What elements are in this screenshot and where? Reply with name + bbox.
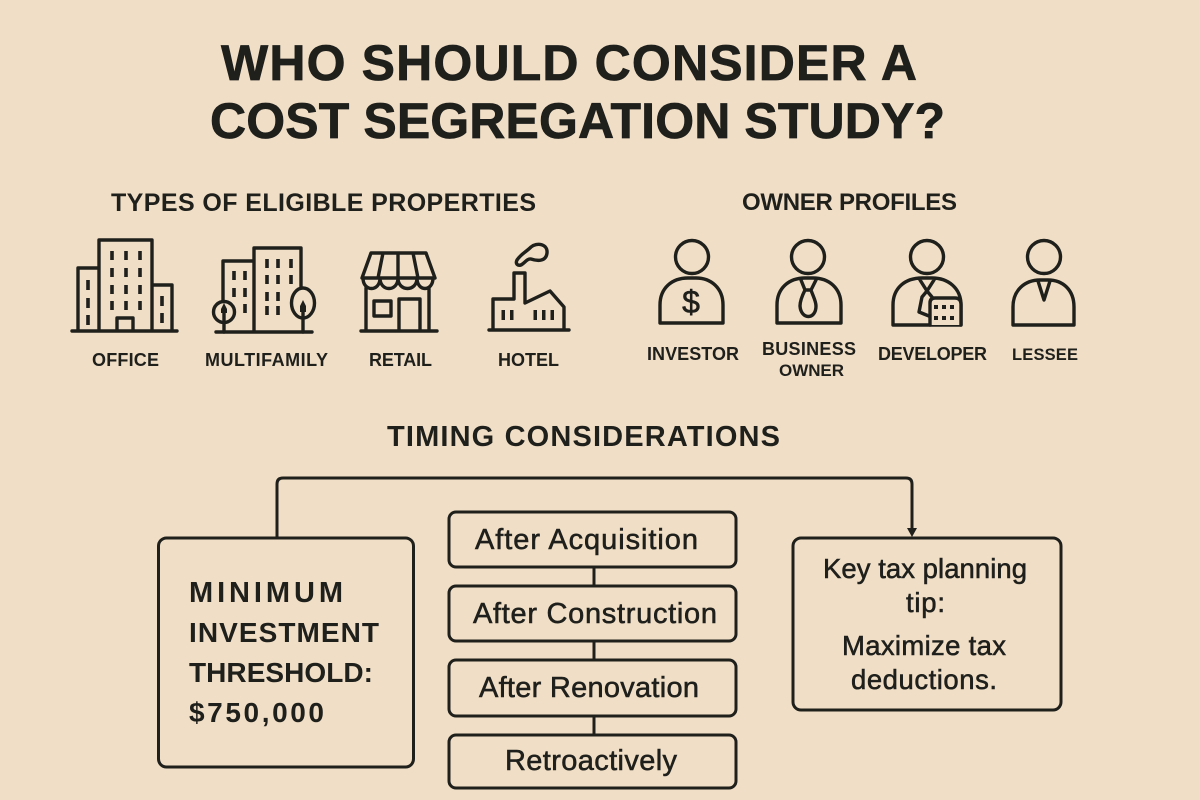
label: office: OFFICE [92,350,159,370]
step: retroactively [449,735,736,788]
panel: key tax planning tip: tip: [906,587,945,618]
step: after acquisition [449,512,736,567]
icon: multifamily [214,248,314,332]
panel: key tax planning tip: deductions. [851,664,997,695]
step: after construction: After Construction [473,598,717,630]
title: WHO SHOULD CONSIDER A [221,35,917,91]
panel: minimum investment threshold: THRESHOLD: [189,657,373,688]
icon: investor: $ [682,284,700,320]
panel: key tax planning tip: Maximize tax [842,630,1006,661]
title: COST SEGREGATION STUDY? [210,93,945,149]
label: business owner: BUSINESS [762,339,856,359]
panel: key tax planning tip [793,538,1061,710]
arrow: connector from threshold box to tax tip box [277,478,917,538]
label: retail: RETAIL [369,350,432,370]
panel: key tax planning tip: Key tax planning [823,553,1027,584]
step: retroactively: Retroactively [505,745,678,777]
label: investor: INVESTOR [647,344,739,364]
heading: types of eligible properties: TYPES OF ELIGIBLE PROPERTIES [111,189,536,217]
label: business owner: OWNER [779,361,844,380]
timeline connectors [592,567,596,735]
label: hotel: HOTEL [498,350,559,370]
label: lessee: LESSEE [1012,346,1078,364]
icon: retail [361,253,437,331]
step: after renovation: After Renovation [479,672,699,704]
label: multifamily: MULTIFAMILY [205,350,328,370]
step: after renovation [449,660,736,716]
icon: lessee [1013,240,1074,325]
label: developer: DEVELOPER [878,344,987,364]
heading: owner profiles: OWNER PROFILES [742,189,957,216]
label: business owner [762,339,856,380]
heading: timing considerations: TIMING CONSIDERATIONS [387,421,780,453]
icon: investor [660,240,723,323]
panel: minimum investment threshold [158,538,414,767]
icon: hotel [489,244,569,330]
icon: developer [893,240,961,325]
panel: minimum investment threshold: INVESTMENT [189,617,379,648]
step: after acquisition: After Acquisition [475,524,698,556]
icon: office [72,240,177,331]
step: after construction [449,586,736,641]
title [210,35,945,149]
icon: business owner [777,240,841,323]
panel: minimum investment threshold: $750,000 [189,697,324,728]
panel: minimum investment threshold: MINIMUM [189,577,343,609]
